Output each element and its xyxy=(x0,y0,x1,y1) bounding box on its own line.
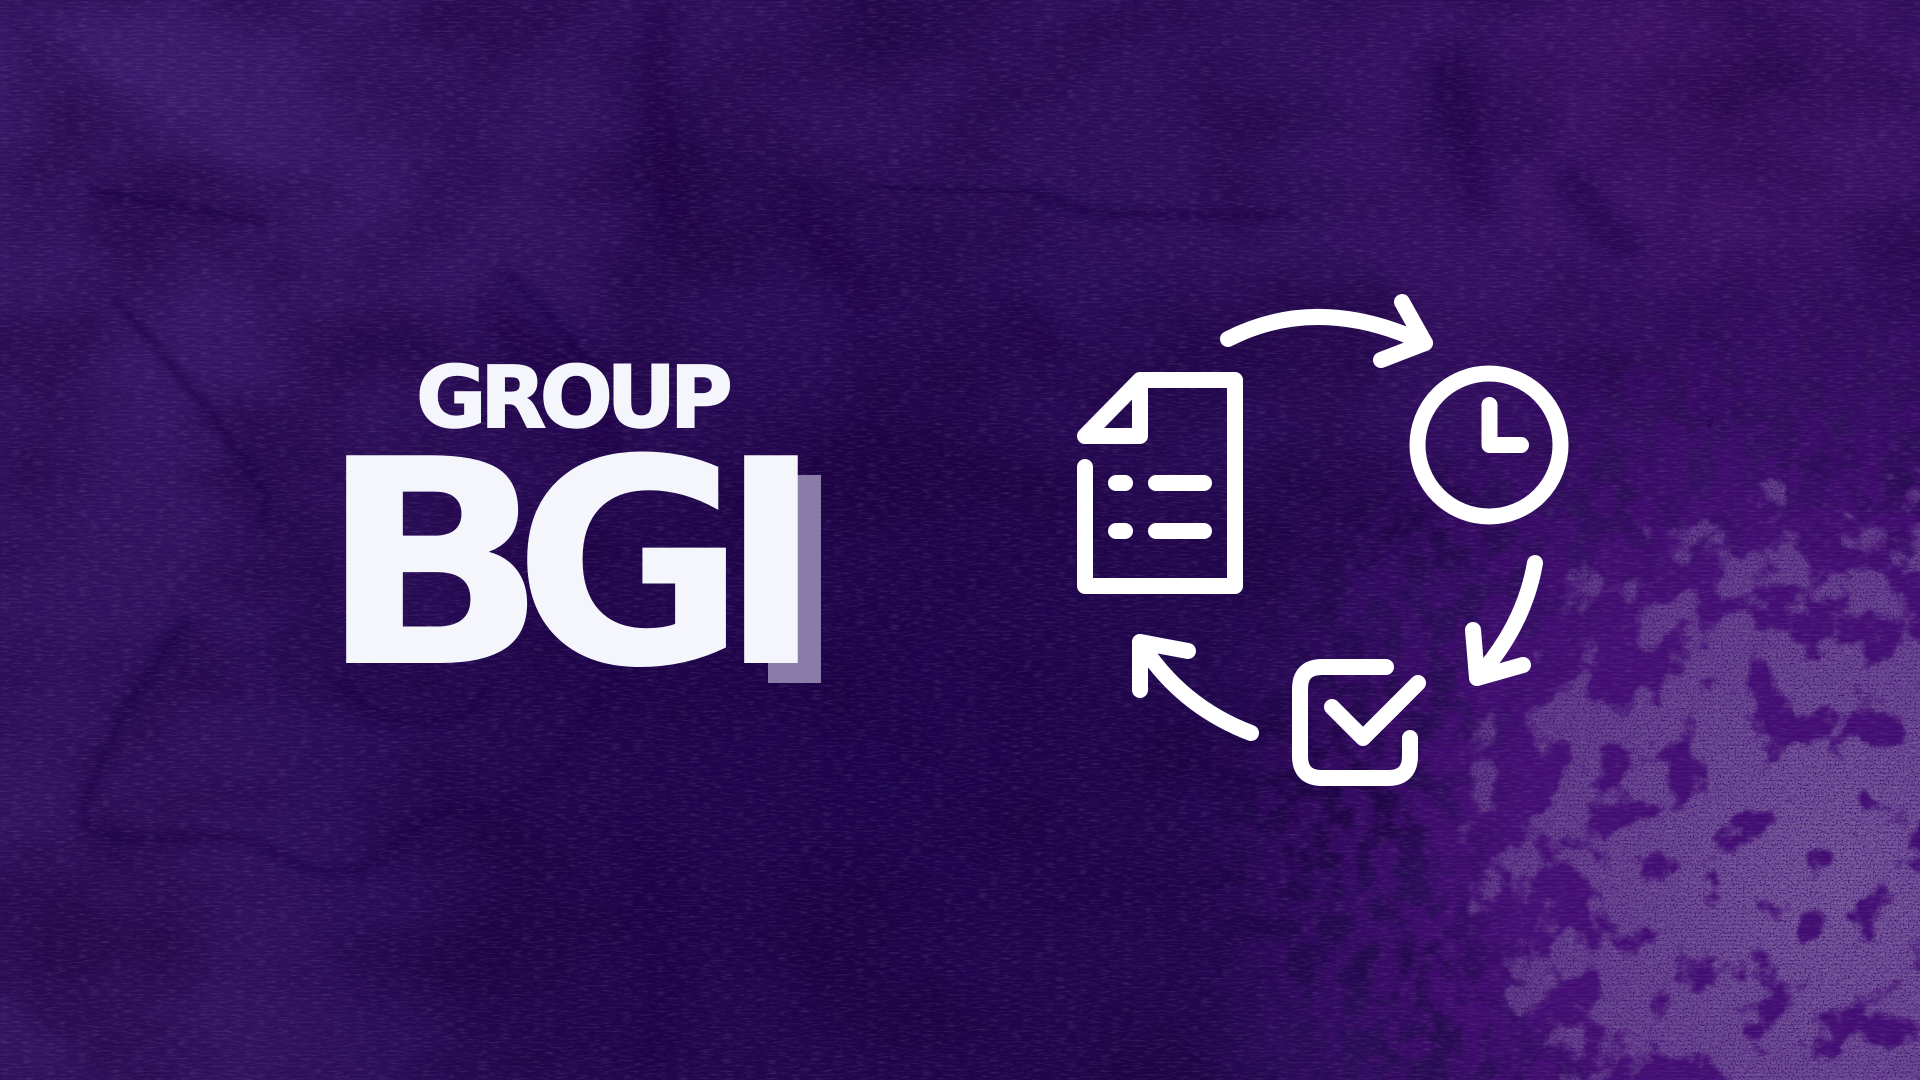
logo letters: BGI xyxy=(318,399,824,731)
logo letters: BGI: G xyxy=(513,399,747,731)
icon: document with list xyxy=(1085,380,1235,586)
arrow: clock to checklist xyxy=(1473,563,1535,678)
icon: checked box xyxy=(1300,667,1418,778)
logo shadow bar xyxy=(768,475,821,683)
logo letters: BGI: I xyxy=(718,399,824,731)
icon: clock xyxy=(1418,374,1560,516)
process cycle icon xyxy=(1085,302,1560,778)
logo: Group BGI xyxy=(318,348,824,731)
arrow: document to clock xyxy=(1228,302,1425,360)
logo word: GROUP: GROUP xyxy=(416,348,730,448)
logo letters: BGI: B xyxy=(318,400,548,731)
arrow: checklist to document xyxy=(1140,642,1251,733)
